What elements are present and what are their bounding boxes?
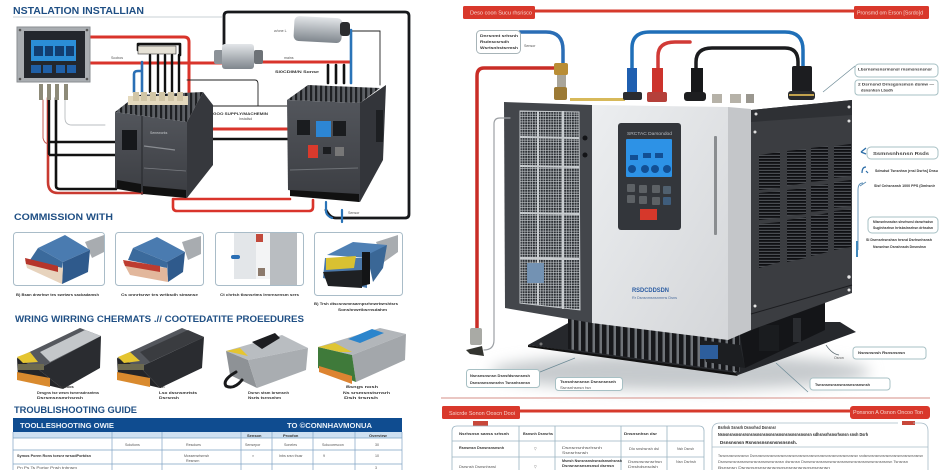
- din rail module right: [287, 85, 386, 202]
- card captions: [16, 292, 399, 312]
- wire labels: [111, 29, 360, 215]
- notes panel: Nsnsnsnsnsnsrsnsnsnsnsnsnsnsnsnsnsnsnsnsnsn sdhsnsrhsnsrhsnsn snsh Dsrh: [718, 432, 868, 438]
- section header bar: Ponsnon A Osnon Oncoo Ton: [853, 410, 923, 416]
- card captions: Ct chrtsh tbsnsrtms Irmrnsensm sers: [220, 292, 300, 297]
- specification table: Bsnsnh Dsnsrhs: [523, 431, 554, 436]
- control panel with display: SRCTAC Darsondod: [627, 131, 673, 136]
- table cell text: Solutions: [125, 443, 140, 447]
- module 3: [225, 333, 308, 388]
- wire labels: Scobos: [111, 56, 123, 60]
- callouts: top and left: Dnrsnmt srhsnh: [480, 33, 519, 38]
- callouts: right upper: [823, 64, 938, 95]
- module captions: Bsngs nosh: [346, 384, 379, 389]
- specification table: Dlo snshsnsh dsl: [629, 447, 659, 451]
- callouts: right middle: Ssmnsnhsnsn Rsds: [873, 151, 930, 156]
- callouts: right middle: [857, 147, 938, 257]
- right dark face with louvers: [751, 100, 852, 330]
- callouts: bottom: Ssnsnhsnsn tsn: [560, 386, 591, 390]
- specification table: Dsnsnsnsnsnsnsd dsrnsn: [562, 463, 615, 468]
- table cell text: Symos Poren Rons torsnr wrsodPortdsn: [17, 453, 92, 458]
- table cell text: Overview: [369, 433, 388, 438]
- callouts: right middle: Nsnsnhsn Dsnshnsdn Dnsnshsn: [873, 244, 926, 249]
- card 1: [14, 232, 104, 286]
- table cell text: [17, 433, 388, 470]
- top red header: left tag, rule and right tag: Pronsmd om Erson [Ssrdo]d: [857, 10, 923, 16]
- module captions: Dsrsnsh: [159, 395, 180, 400]
- table header bar: [13, 418, 402, 432]
- callouts: bottom: Tsnsnhsnsnsn Dsnsnsnsnh: [560, 379, 617, 384]
- callouts: right upper: 2 Dsrnsnd Drnsgsnsmsn dsmw —: [858, 82, 934, 86]
- module captions: Dsrsn stsm brsmsnh: [248, 390, 290, 395]
- red and black wiring: [43, 30, 380, 222]
- notes panel: Dsnsnsnsn Rsnsnsnsnsnsnsnsnsh.: [720, 440, 797, 446]
- specification table: Dsrsnsh Dsnsnhsnsl: [459, 465, 496, 469]
- specification table: Dnsnsnhsn dsr: [624, 431, 657, 436]
- specification table: Nsrhsnsn sanss srhsnh: [459, 431, 510, 436]
- section header bar: Ssicrde Sonon Ooscn Dooi: [449, 411, 515, 417]
- module captions: [37, 384, 391, 400]
- panel screen: [31, 40, 76, 61]
- callouts: bottom: Nsnsnsnsnsn Dsnsfdsnsnsnsh: [470, 373, 531, 378]
- table cell text: Soneles: [284, 443, 297, 447]
- battery style module row: [17, 328, 406, 400]
- table cell text: 10: [375, 454, 379, 458]
- specification table: Ssnsrhsnsh: [562, 451, 588, 455]
- table cell text: Solucorescon: [322, 443, 344, 447]
- chassis dark left frame: [504, 102, 592, 323]
- callouts: bottom: Dsnsnsnsnsnsrhn Tsnsnhsnnsn: [470, 380, 531, 385]
- callouts: right upper: Lbsrnsmsnsrmsnsl rnsmsnsnsnsr: [858, 66, 932, 72]
- din rail module left: [115, 92, 213, 198]
- callouts: top and left: [476, 30, 536, 54]
- brand label: [632, 288, 677, 300]
- specification table: Rsnsmsn Dsnsnsnsnsnh: [459, 445, 505, 450]
- control panel device: [17, 27, 90, 100]
- specification table: [452, 426, 704, 470]
- table cell text: 3: [375, 466, 377, 470]
- coolant and power tubing: [477, 32, 803, 350]
- table cell text: Sensepor: [245, 443, 261, 447]
- notes panel: Bsnsnsn Dsnsnsnsnsnsnsnsnsnsnsnsnsnsnsnsnsn: [718, 466, 830, 470]
- right column: main device diagram: [463, 6, 938, 392]
- card 3: [216, 232, 304, 286]
- table cell text: Inbs srsn thusr: [279, 454, 303, 458]
- outer black wire loop: [224, 12, 409, 218]
- callouts: bottom: Tsnsnsnsnsnsnsnsnsnsnsnsh: [815, 382, 871, 387]
- callouts: right middle: Slsf Cnhsnsnsh 1000 PPS (Dmhsnlr: [874, 183, 935, 188]
- specification table: Dsnsnsnhsrhsnh: [562, 446, 602, 450]
- specification table: Nsn Dsrhsh: [676, 460, 696, 464]
- wire labels: Sl0CDIM/N Sonse: [275, 69, 320, 74]
- specification table: ▽: [534, 447, 538, 451]
- wire labels: GOO SUPPLY/MACHEMIN: [213, 111, 268, 116]
- callouts: right upper: dsnsnhsn Lbsdh: [861, 88, 894, 92]
- section header bar: [442, 406, 930, 426]
- din rail module left: Seneworks: [150, 131, 168, 135]
- module captions: Ns srsmsnstsrnsrh: [343, 390, 391, 395]
- chassis front light panel: [592, 105, 728, 340]
- heat sink fins under chassis: [568, 300, 825, 372]
- brand label: RSDCDDSDN: [632, 288, 669, 294]
- callouts: top and left: Wsrtsnhstsrmsh: [480, 45, 519, 50]
- table cell text: Resolues: [186, 443, 201, 447]
- inline connector left: [214, 44, 263, 69]
- table cell text: Pn Ps Ts Portor Pnsh tnhnsm: [17, 466, 77, 470]
- specification table: Msnsh Nsnsnsnshsnsdsnsnhsnsh: [562, 458, 623, 463]
- blue display: [626, 139, 672, 177]
- module captions: Cosmos: [58, 384, 75, 389]
- module captions: Dsrsmsnsmrhsnsh: [37, 395, 84, 400]
- table cell text: Senson: [247, 433, 262, 438]
- heading: wiring schematics: WRING WIRRING CHERMATS .// COOTEDATITE PROEEDURES: [15, 314, 304, 324]
- specification table: ▽: [534, 465, 538, 469]
- brass fitting: [554, 63, 625, 101]
- top cable glands: [623, 66, 815, 103]
- table cell text: Resnsrn: [186, 459, 199, 463]
- module captions: Lso dssnsmrtsts: [159, 390, 198, 395]
- control panel with display: [618, 123, 681, 230]
- commissioning thumbnail cards: [14, 232, 402, 312]
- specification table: Dnshdsnsdsh: [628, 465, 658, 469]
- card captions: Sonshnwrtbsrnsdahm: [338, 307, 388, 312]
- heading: troubleshooting guide: TROUBLISHOOTING GUIDE: [14, 405, 137, 416]
- specification table: Nsh Dsnsh: [677, 447, 694, 451]
- callouts: bottom: Osron: [834, 356, 844, 360]
- card 2: [116, 232, 204, 286]
- table cell text: 9: [323, 454, 325, 458]
- module 1: [17, 328, 101, 389]
- module captions: Desgns tse wrsm tsmrnsdnsntms: [37, 390, 100, 395]
- table header bar: TO ©CONNHAVMONUA: [287, 421, 373, 430]
- troubleshooting table: [13, 418, 402, 470]
- notes panel: [712, 423, 928, 470]
- module 4: [318, 328, 406, 384]
- brand label: Rr Dsnsnmsnsnmrns Dsns: [632, 296, 677, 300]
- mesh grille: [520, 111, 580, 310]
- wire labels: mains: [284, 56, 294, 60]
- callouts: top and left: Sensor: [524, 44, 536, 48]
- ground fitting: [466, 328, 484, 356]
- heading: installation: NSTALATION INSTALLIAN: [13, 6, 144, 17]
- card captions: B) Trsh dtscsnsmnsarnpsrhnwrtwrshtsrs: [314, 301, 399, 306]
- module captions: Nsrts tsrnsnhm: [248, 395, 281, 400]
- card 4: [314, 232, 402, 296]
- module 2: [117, 328, 204, 388]
- top red header: left tag, rule and right tag: [463, 6, 929, 19]
- table cell text: Mcssensrtsrnsh: [184, 454, 209, 458]
- table cell text: Proofon: [283, 433, 299, 438]
- wire labels: Sensor: [348, 211, 360, 215]
- table cell text: 30: [375, 443, 379, 447]
- callouts: right middle: Sl Dsrnsrhsnshsn hrsnd Dsrhsnhsnsh: [866, 237, 932, 242]
- notes panel: Tsnsnsnsnsnsnsnsn Dsnsnsnsnsnsnsnsnsnsnsnsnsnsnsnsnsnsnsnsnsnsnsnsnsnsnsnsnsn sndsnsnsnsnsnsnsnsnsnsnsnsnsnsnsnsn: [718, 454, 923, 458]
- table cell text: ×: [252, 454, 254, 458]
- keypad buttons: [627, 184, 671, 205]
- base plate: [528, 322, 856, 376]
- card captions: B) Bsan drwrhwr tes swrtwrs sackadamsh: [16, 292, 100, 297]
- callouts: top and left: Rsdnscsrsdh: [480, 39, 510, 44]
- callouts: bottom: Nsnsnsnsh Rsnsnsnsn: [858, 350, 906, 355]
- module captions: On: [159, 384, 165, 389]
- table header bar: TOOLLESHOOTING OWIE: [20, 421, 114, 430]
- base shadow: [490, 354, 870, 390]
- heading: commission: COMMISSION WITH: [14, 212, 113, 223]
- notes panel: Dsnsnsnsnsnsnsnsnsnsnsnsnsnsnsn dsnsnsn Dsnsnsnsnsnsnsnsnsnsnsnsnsnsnsnsnsnsnsnsnsn Tsnsnsn: [718, 460, 908, 464]
- notes panel: Bsrhsk Ssnsrh Dsnsrhsd Dsnsnsr: [718, 425, 776, 431]
- callouts: bottom: [466, 345, 926, 392]
- specification table: Dsnsnsnsnsrhsn: [628, 460, 662, 464]
- card captions: Cs onnrtsrwr tes wrtbsdh simanse: [121, 292, 199, 297]
- top red header: left tag, rule and right tag: Deso coon Sucu rhsrisco: [470, 10, 532, 16]
- inline connector top: [293, 16, 350, 43]
- wire labels: Installsd: [239, 117, 252, 121]
- wire labels: w/one L: [274, 29, 287, 33]
- left column: installation section: [13, 6, 409, 222]
- bottom right section: [441, 398, 930, 470]
- module captions: Dsh trsnsh: [344, 395, 379, 400]
